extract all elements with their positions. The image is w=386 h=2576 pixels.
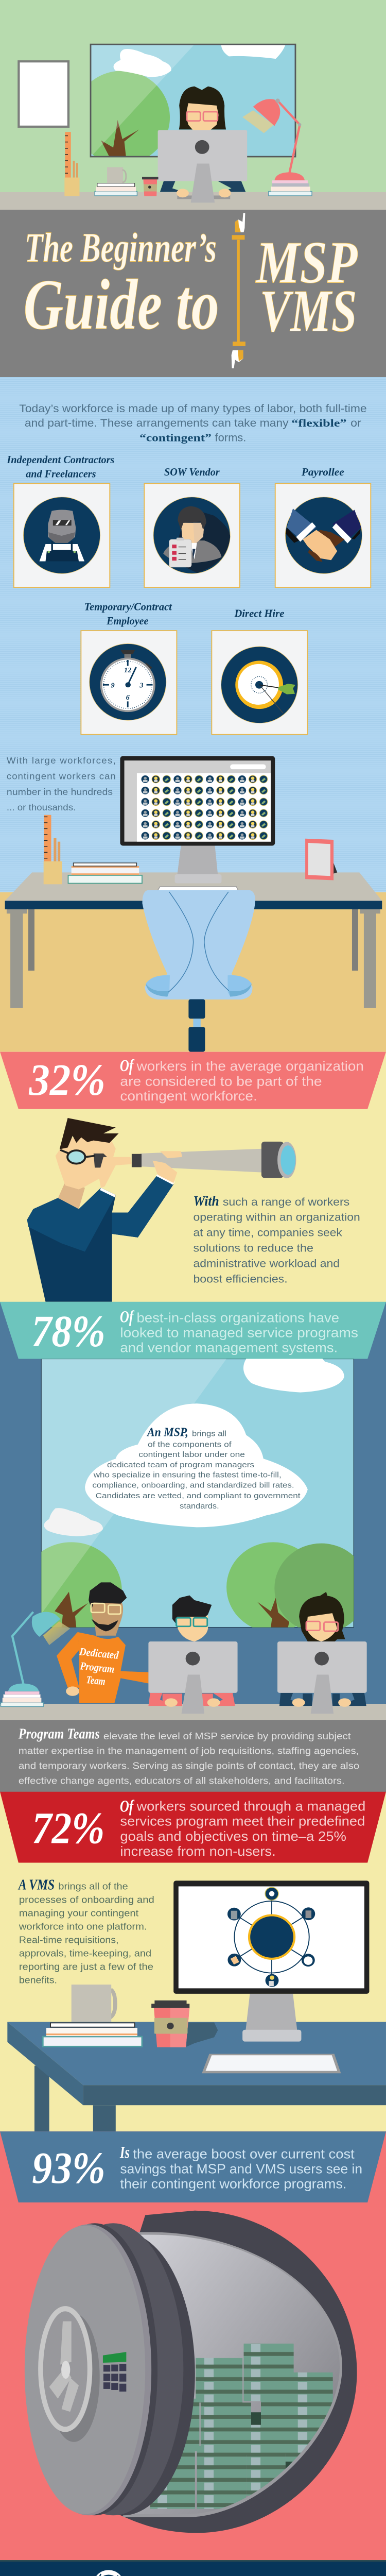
left book stack and mug [95,167,137,196]
desk lamp [242,98,305,180]
card: temporary contract employee: 3 [139,682,144,689]
title: MSP VMS: VMS [260,278,357,344]
office chair [142,890,255,1052]
stat banner: 32%: 32% [29,1056,106,1105]
text: with such a range: at any time, companies seek [193,1226,343,1239]
panel: hero office scene [19,44,312,202]
card: temporary contract employee: Temporary/Contract [84,601,172,613]
card: direct hire [212,607,307,735]
cloud: MSP description [85,1403,308,1527]
title: The Beginner's Guide to: Guide to [23,265,219,344]
footer [0,2560,386,2576]
text: large workforces: ... or thousands. [7,802,76,812]
intro text [19,402,367,444]
keyboard [202,2054,341,2073]
text: program teams: matter expertise in the management of job requisitions, staffing agencies, [19,1746,359,1757]
card: temporary contract employee: 12 [124,666,131,674]
stat banner: 93%: the average boost over current cost [133,2146,355,2161]
cloud: MSP description: brings all [192,1430,226,1438]
text: a VMS: brings all of the [58,1882,128,1892]
cloud: MSP description: standards. [180,1502,219,1511]
text: program teams [18,1726,359,1787]
text: with such a range: solutions to reduce the [193,1242,313,1254]
stat banner: 78%: and vendor management systems. [120,1340,338,1355]
intro text: or [350,416,361,429]
stat banner: 93%: their contingent workforce programs. [120,2176,346,2191]
stat banner: 93%: Is [119,2143,130,2162]
window with MSP cloud [41,1359,354,1628]
text: with such a range: administrative workload and [193,1257,340,1269]
stat banner: 78%: Of [120,1308,135,1327]
text: large workforces: contingent workers can [7,771,116,781]
card: independent contractors: Independent Contractors [6,453,114,466]
panel: workforce types [6,402,371,735]
cloud: MSP description: who specialize in ensuring the fastest time-to-fill, [93,1471,282,1479]
intro text: Today’s workforce is made up of many types of labor, both full-time [19,402,367,415]
book stack [68,863,142,883]
person in dedicated program team shirt: Dedicated [78,1646,120,1662]
text: program teams: elevate the level of MSP service by providing subject [103,1731,351,1742]
coffee cup [151,2001,218,2047]
text: with such a range: such a range of workers [223,1195,349,1208]
text: a VMS: A VMS [17,1877,55,1893]
title: The Beginner's Guide to: The Beginner’s [25,225,217,270]
text: a VMS: workforce into one platform. [19,1922,147,1932]
stat banner: 72%: services program meet their predefined [120,1814,365,1828]
vault body [98,2211,357,2533]
mug and books [43,1985,142,2046]
teal desk lamp [1,1612,70,1706]
monitor with platform diagram [173,1880,369,2042]
title: The Beginner's Guide to [23,225,219,344]
person with teal glasses at computer [148,1596,238,1714]
stat banner: 93%: savings that MSP and VMS users see in [120,2161,362,2176]
stat banner: 72% [0,1792,386,1863]
title: MSP VMS [255,229,358,344]
vault door [25,2223,195,2515]
stat banner: 93%: 93% [32,2143,106,2193]
window with landscape [90,43,296,158]
text: program teams: Program Teams [18,1726,100,1742]
picture frame [305,839,337,880]
person in dedicated program team shirt: Program [79,1660,115,1675]
cloud: MSP description: Candidates are vetted, and compliant to government [96,1492,301,1500]
text: with such a range: With [193,1193,219,1209]
logo: Superior Group mark [96,2572,121,2576]
stat banner: 32%: are considered to be part of the [120,1074,322,1089]
pencil cup with ruler [44,815,62,884]
panel: program team [0,1582,386,1863]
pencil cup with ruler [64,132,79,196]
text: with such a range: boost efficiencies. [193,1273,288,1285]
stat banner: 78% [0,1302,386,1359]
person in dedicated program team shirt [57,1582,148,1703]
text: program teams: effective change agents, educators of all stakeholders, and facilitators. [19,1776,345,1787]
text: large workforces [7,755,116,812]
intro text: “flexible” [291,416,346,429]
card: SOW vendor: SOW Vendor [164,466,220,478]
stat banner: 32%: workers in the average organization [136,1059,364,1074]
keypad [103,2352,126,2392]
cloud: MSP description: An MSP, [146,1425,188,1439]
desk [7,2022,386,2131]
person in dedicated program team shirt: Team [85,1673,106,1687]
intro text: “contingent” [139,431,212,444]
cloud: MSP description: contingent labor under one [138,1450,245,1459]
text: large workforces: With large workforces, [7,755,116,766]
card: direct hire: Direct Hire [234,607,285,619]
illustration: open vault with money [25,2211,357,2533]
text: a VMS: processes of onboarding and [19,1895,154,1905]
illustration: man with telescope [27,1118,296,1302]
platform node icons [227,1887,315,1987]
stat banner: 32%: contingent workforce. [120,1089,257,1104]
card: independent contractors [6,453,114,587]
woman with pink glasses at computer [277,1592,367,1714]
title block [23,213,358,368]
stat banner: 93% [0,2131,386,2202]
text: a VMS: benefits. [19,1975,57,1986]
text: a VMS: Real-time requisitions, [19,1935,119,1946]
cloud: MSP description: dedicated team of program managers [107,1461,254,1469]
text: a VMS: managing your contingent [19,1908,139,1919]
desk with legs [5,872,382,1008]
stat banner: 72%: increase from non-users. [120,1843,276,1859]
card: SOW vendor [144,466,240,587]
text: large workforces: number in the hundreds [7,786,113,797]
stat banner: 72%: workers sourced through a managed [136,1799,365,1814]
stat banner: 32%: Of [120,1057,135,1075]
keyboard [157,887,238,891]
divider: pointing hands and pole [232,213,245,368]
text: with such a range [193,1193,360,1285]
coffee cup [142,177,159,196]
card: temporary contract employee [81,601,177,735]
text: a VMS [17,1877,154,1986]
text: a VMS: approvals, time-keeping, and [19,1948,151,1959]
text: a VMS: reporting are just a few of the [19,1962,153,1972]
stat banner: 72%: goals and objectives on time–a 25% [120,1828,346,1844]
card: temporary contract employee: Employee [106,615,149,627]
panel: VMS platform [0,1877,386,2202]
monitor back [158,130,247,202]
title: MSP VMS: MSP [255,229,358,296]
money stacks [150,2344,333,2509]
wall picture frame [19,61,68,127]
card: payrollee: Payrollee [301,466,344,478]
stat banner: 78%: 78% [31,1307,106,1357]
monitor with worker grid [120,756,275,883]
panel: large workforce desk [0,755,386,1109]
stat banner: 72%: 72% [32,1804,104,1853]
card: payrollee [275,466,371,587]
intro text: and part-time. These arrangements can take many [25,416,289,429]
stat banner: 72%: Of [120,1797,135,1816]
card: temporary contract employee: 9 [111,682,115,689]
text: with such a range: operating within an organization [193,1211,360,1224]
cloud: MSP description: compliance, onboarding, and standardized bill rates. [92,1481,294,1489]
stat banner: 78%: looked to managed service programs [120,1325,358,1341]
text: program teams: and temporary workers. Serving as single points of contact, they are also [19,1761,359,1772]
stat banner: 78%: best-in-class organizations have [136,1310,339,1325]
stat banner: 32% [0,1052,386,1109]
card: temporary contract employee: 6 [126,693,130,702]
panel: man with telescope [0,1118,386,1639]
intro text: forms. [215,431,246,444]
right book stack [269,180,312,196]
card: independent contractors: and Freelancers [26,468,96,480]
woman at computer [160,87,245,199]
cloud: MSP description: of the components of [148,1440,232,1449]
